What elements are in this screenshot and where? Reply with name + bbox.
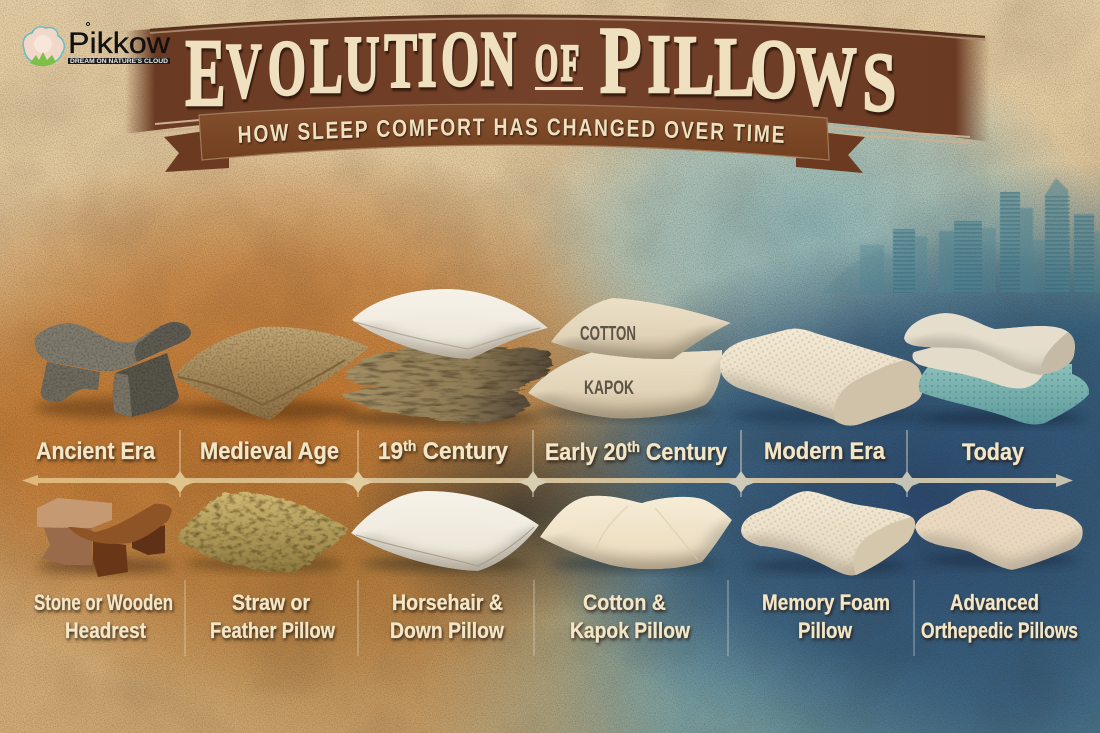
kapok pillow: KAPOK bbox=[584, 378, 634, 399]
caption: Advanced Orthepedic Pillows bbox=[921, 590, 1078, 643]
era label: Early 20th Century: th bbox=[627, 439, 640, 456]
caption: Horsehair and Down Pillow: Horsehair & bbox=[392, 590, 503, 615]
icon: stone headrest bbox=[35, 322, 191, 418]
era label: Early 20th Century: Century bbox=[640, 439, 728, 466]
top contour pillow bbox=[904, 313, 1075, 375]
right ribbon tail bbox=[796, 133, 865, 173]
title word: Evolution: VOLUTION bbox=[226, 17, 516, 115]
cotton pillow: COTTON bbox=[580, 323, 636, 345]
pillow: modern contour foam block bbox=[720, 329, 923, 426]
pillow: straw stuffed bbox=[176, 492, 348, 572]
title banner bbox=[126, 7, 988, 173]
pillow stack: horsehair and down bbox=[340, 289, 552, 426]
title word: Pillows: ILLOWS bbox=[647, 17, 896, 128]
teal pillow bbox=[919, 364, 1089, 424]
pillow: cotton and kapok cream bbox=[540, 496, 732, 571]
banner stripes bbox=[150, 16, 985, 143]
title word: Pillows: P bbox=[600, 7, 642, 113]
caption: Horsehair and Down Pillow bbox=[390, 590, 505, 643]
cotton pillow bbox=[551, 298, 731, 359]
banner back band bbox=[125, 15, 990, 142]
caption: Memory Foam Pillow: Memory Foam bbox=[762, 590, 890, 615]
logo tagline: DREAM ON NATURE'S CLOUD bbox=[70, 59, 169, 65]
pillow: memory foam contour bbox=[741, 491, 915, 576]
icon: stone block and wooden headrest bbox=[37, 498, 173, 577]
caption: Straw or Feather Pillow: Straw or bbox=[232, 590, 310, 615]
title word: of: OF bbox=[535, 35, 579, 92]
middle pillow bbox=[912, 340, 1047, 388]
caption: Stone or Wooden Headrest: Stone or Wooden bbox=[34, 590, 173, 615]
caption: Stone or Wooden Headrest: Headrest bbox=[65, 618, 147, 643]
left ribbon tail bbox=[164, 131, 229, 172]
kapok pillow bbox=[528, 350, 722, 418]
caption: Cotton and Kapok Pillow: Cotton & bbox=[583, 590, 666, 615]
era label: Today: Today bbox=[962, 439, 1025, 466]
timeline ornaments bbox=[165, 471, 922, 493]
subtitle: HOW SLEEP COMFORT HAS CHANGED OVER TIME bbox=[238, 118, 786, 146]
caption: Straw or Feather Pillow bbox=[210, 590, 336, 643]
era label: Early 20th Century: Early 20 bbox=[545, 439, 637, 466]
subtitle ribbon bbox=[199, 104, 829, 160]
white down pillow bbox=[352, 289, 548, 359]
logo wordmark: Pikkow bbox=[68, 27, 170, 60]
era label: Modern Era: Modern Era bbox=[764, 438, 886, 465]
pillow: medieval burlap sack bbox=[174, 327, 369, 420]
caption: Memory Foam Pillow: Pillow bbox=[798, 618, 853, 643]
era label: Ancient Era: Ancient Era bbox=[36, 438, 156, 465]
caption: Cotton and Kapok Pillow: Kapok Pillow bbox=[570, 618, 691, 643]
caption: Cotton and Kapok Pillow bbox=[570, 590, 691, 643]
caption: Stone or Wooden Headrest bbox=[34, 590, 173, 643]
timeline arrow bbox=[22, 430, 1073, 497]
caption: Advanced Orthepedic Pillows: Advanced bbox=[950, 590, 1039, 615]
horsehair layers bbox=[342, 346, 552, 423]
logo bbox=[23, 22, 170, 66]
pillow: advanced orthopedic bbox=[915, 490, 1083, 570]
pillow: white horsehair and down bbox=[351, 491, 539, 571]
era label: 19th Century: th bbox=[403, 438, 416, 455]
era label: 19th Century: 19 bbox=[378, 438, 405, 465]
era dividers bbox=[180, 430, 907, 497]
caption: Memory Foam Pillow bbox=[762, 590, 890, 643]
title word: Evolution: E bbox=[185, 21, 226, 127]
lower column dividers bbox=[185, 580, 914, 656]
era label: 19th Century: Century bbox=[416, 438, 509, 465]
pillow stack: modern orthopedic set bbox=[904, 313, 1089, 425]
caption: Straw or Feather Pillow: Feather Pillow bbox=[210, 618, 336, 643]
pillow stack: cotton and kapok bbox=[528, 298, 731, 419]
caption: Horsehair and Down Pillow: Down Pillow bbox=[390, 618, 505, 643]
logo cotton icon bbox=[23, 27, 64, 66]
era label: Medieval Age: Medieval Age bbox=[200, 438, 339, 465]
distant city skyline bbox=[820, 178, 1100, 293]
